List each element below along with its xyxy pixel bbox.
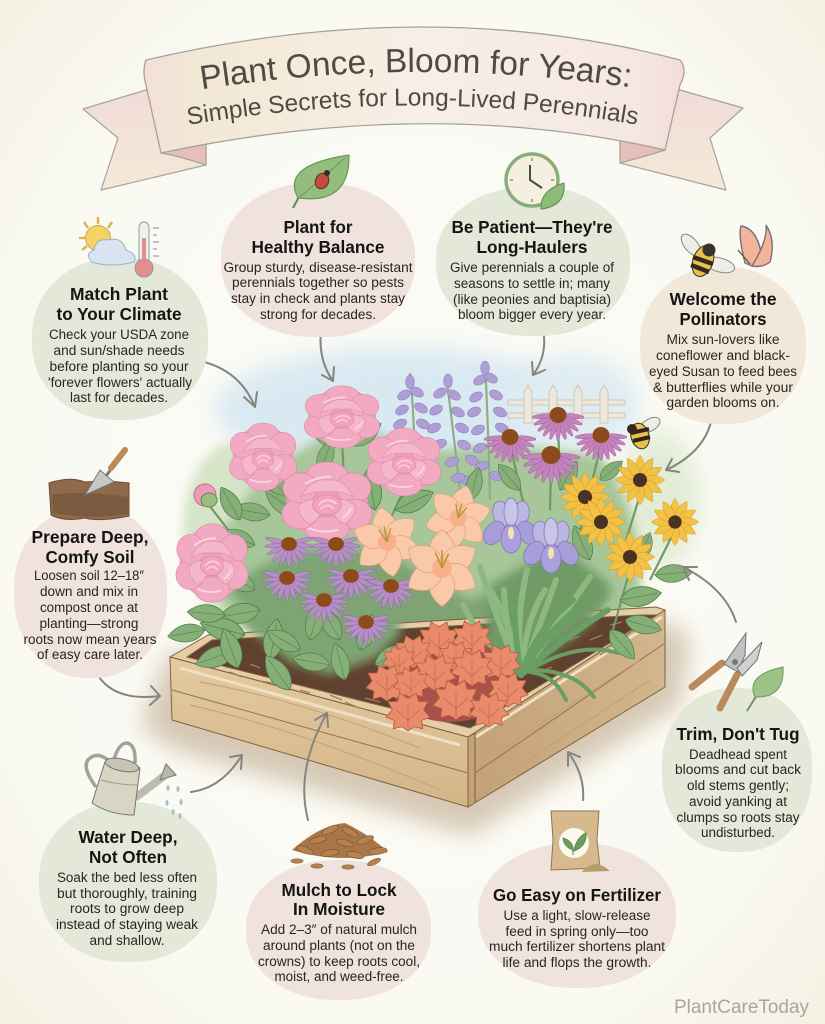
heading: Be Patient—They're — [452, 217, 613, 237]
heading: In Moisture — [293, 899, 385, 919]
peony blooms — [176, 386, 441, 602]
body text: crowns) to keep roots cool, — [258, 954, 420, 969]
body text: garden blooms on. — [666, 395, 780, 410]
title text: Plant Once, Bloom for Years: — [200, 48, 630, 89]
icon: sun cloud thermometer — [79, 217, 159, 277]
body text: around plants (not on the — [263, 938, 415, 953]
arrow: soil to garden — [96, 672, 160, 705]
body text: roots to grow deep — [70, 901, 184, 916]
central raised garden bed illustration — [166, 361, 699, 807]
wooden bed — [170, 607, 665, 807]
icon: cut leaf — [747, 667, 783, 711]
heading — [252, 217, 385, 257]
body text: old stems gently; — [687, 778, 789, 793]
heading: Plant for — [284, 217, 353, 237]
body text: of easy care later. — [37, 647, 143, 662]
arrow: water to garden — [191, 755, 242, 792]
lilies — [345, 477, 500, 606]
body text: Check your USDA zone — [49, 327, 189, 342]
body text — [675, 747, 801, 840]
body text: but thoroughly, training — [57, 886, 197, 901]
body text: roots now mean years — [24, 632, 157, 647]
black-eyed Susans — [560, 455, 699, 582]
green foliage mass behind flowers — [205, 425, 640, 670]
banner tails — [83, 90, 743, 190]
heading: Pollinators — [680, 309, 767, 329]
body text: life and flops the growth. — [502, 955, 652, 970]
body text: Loosen soil 12–18″ — [34, 568, 144, 583]
banner ribbon — [144, 27, 684, 153]
heading: Water Deep, — [78, 827, 178, 847]
heuchera foliage — [366, 621, 528, 731]
heading: Mulch to Lock — [282, 880, 397, 900]
body text: coneflower and black- — [656, 348, 790, 363]
body text: Deadhead spent — [689, 747, 787, 762]
arrow: trim to garden — [683, 567, 736, 622]
icon: bee — [678, 231, 736, 279]
body text: Group sturdy, disease-resistant — [224, 260, 413, 275]
arrow: patience to garden — [532, 329, 545, 375]
heading: Healthy Balance — [252, 237, 385, 257]
body text: clumps so roots stay — [676, 810, 800, 825]
body text: and shallow. — [90, 933, 164, 948]
body text: down and mix in — [40, 584, 138, 599]
icon: fertilizer bag — [551, 811, 610, 872]
body text: bloom bigger every year. — [458, 307, 606, 322]
icon: soil with trowel — [49, 450, 129, 520]
body text: Give perennials a couple of — [450, 260, 614, 275]
icon: mulch pile — [291, 823, 388, 869]
irises — [479, 498, 583, 573]
panel: water deep — [39, 743, 217, 962]
body text: (like peonies and baptisia) — [453, 292, 611, 307]
body text: eyed Susan to feed bees — [649, 364, 797, 379]
heading — [452, 217, 613, 257]
panel: prepare deep comfy soil — [14, 450, 167, 678]
body text: instead of staying weak — [56, 917, 198, 932]
body text: 'forever flowers' actually — [48, 375, 192, 390]
body text: undisturbed. — [701, 825, 775, 840]
panel: welcome the pollinators — [640, 225, 806, 424]
arrow: balance to garden — [320, 331, 334, 381]
picket fence — [508, 385, 625, 423]
body text: Soak the bed less often — [57, 870, 197, 885]
peony bud — [194, 484, 217, 507]
body text: moist, and weed-free. — [274, 969, 404, 984]
title banner — [82, 26, 744, 191]
heading: Comfy Soil — [46, 547, 134, 567]
body text: avoid yanking at — [689, 794, 787, 809]
heading — [32, 527, 148, 567]
front coneflowers — [263, 536, 415, 645]
body text — [224, 260, 413, 322]
body text: last for decades. — [70, 390, 168, 405]
icon: butterfly — [738, 225, 772, 266]
body text: feed in spring only—too — [506, 924, 648, 939]
heading — [56, 284, 182, 324]
heading — [670, 289, 777, 329]
body text — [48, 327, 192, 405]
panel: go easy on fertilizer — [478, 811, 676, 988]
panel: mulch — [246, 823, 431, 1000]
body text: Mix sun-lovers like — [666, 332, 780, 347]
heading: Not Often — [89, 847, 167, 867]
heading — [78, 827, 178, 867]
panel: plant for healthy balance — [221, 155, 415, 337]
body text — [24, 568, 157, 662]
body text: perennials together so pests — [232, 275, 404, 290]
icon: pruners — [692, 633, 762, 708]
foliage leaves — [166, 416, 693, 696]
body text: stay in check and plants stay — [231, 291, 405, 306]
arrow: climate to garden — [200, 361, 257, 407]
heading: Go Easy on Fertilizer — [493, 885, 661, 905]
icon: bumblebee near garden — [627, 414, 663, 451]
body text: seasons to settle in; many — [454, 276, 610, 291]
icon: watering can — [86, 743, 183, 819]
body text: Use a light, slow-release — [504, 908, 650, 923]
panel: match plant to climate — [32, 217, 208, 420]
body text — [450, 260, 614, 322]
body text — [489, 908, 665, 970]
body text: & butterflies while your — [653, 380, 794, 395]
body text — [258, 922, 420, 984]
grass blades — [463, 567, 618, 700]
arrow: mulch to garden — [304, 713, 328, 820]
watermark: PlantCareToday — [674, 996, 809, 1018]
upper coneflowers — [484, 407, 627, 483]
arrow: pollinators to garden — [666, 418, 712, 472]
body text — [56, 870, 198, 948]
body text: strong for decades. — [260, 307, 376, 322]
watercolor wash behind garden — [140, 348, 700, 835]
panel: trim don't tug — [662, 633, 812, 852]
heading: Welcome the — [670, 289, 777, 309]
heading: Prepare Deep, — [32, 527, 148, 547]
heading: to Your Climate — [56, 304, 182, 324]
heading: Match Plant — [70, 284, 168, 304]
body text: much fertilizer shortens plant — [489, 939, 665, 954]
heading: Long-Haulers — [476, 237, 588, 257]
subtitle text: Simple Secrets for Long-Lived Perennials — [188, 88, 638, 124]
coneflower and peony stems — [205, 425, 675, 640]
body text: planting—strong — [40, 616, 138, 631]
body text: and sun/shade needs — [54, 343, 185, 358]
icon: clock with leaf — [506, 154, 564, 209]
body text — [649, 332, 797, 410]
foliage mass above soil — [240, 545, 610, 675]
heading: Trim, Don't Tug — [676, 724, 800, 744]
body text: Add 2–3″ of natural mulch — [261, 922, 417, 937]
heading — [282, 880, 397, 919]
mulch texture — [205, 622, 622, 708]
body text: before planting so your — [50, 359, 189, 374]
body text: compost once at — [40, 600, 138, 615]
panel: be patient — [436, 154, 630, 336]
arrow: fertilizer to garden — [568, 752, 583, 800]
body text: blooms and cut back — [675, 762, 801, 777]
icon: leaf with ladybug — [293, 155, 349, 208]
delphinium spikes — [392, 361, 510, 500]
